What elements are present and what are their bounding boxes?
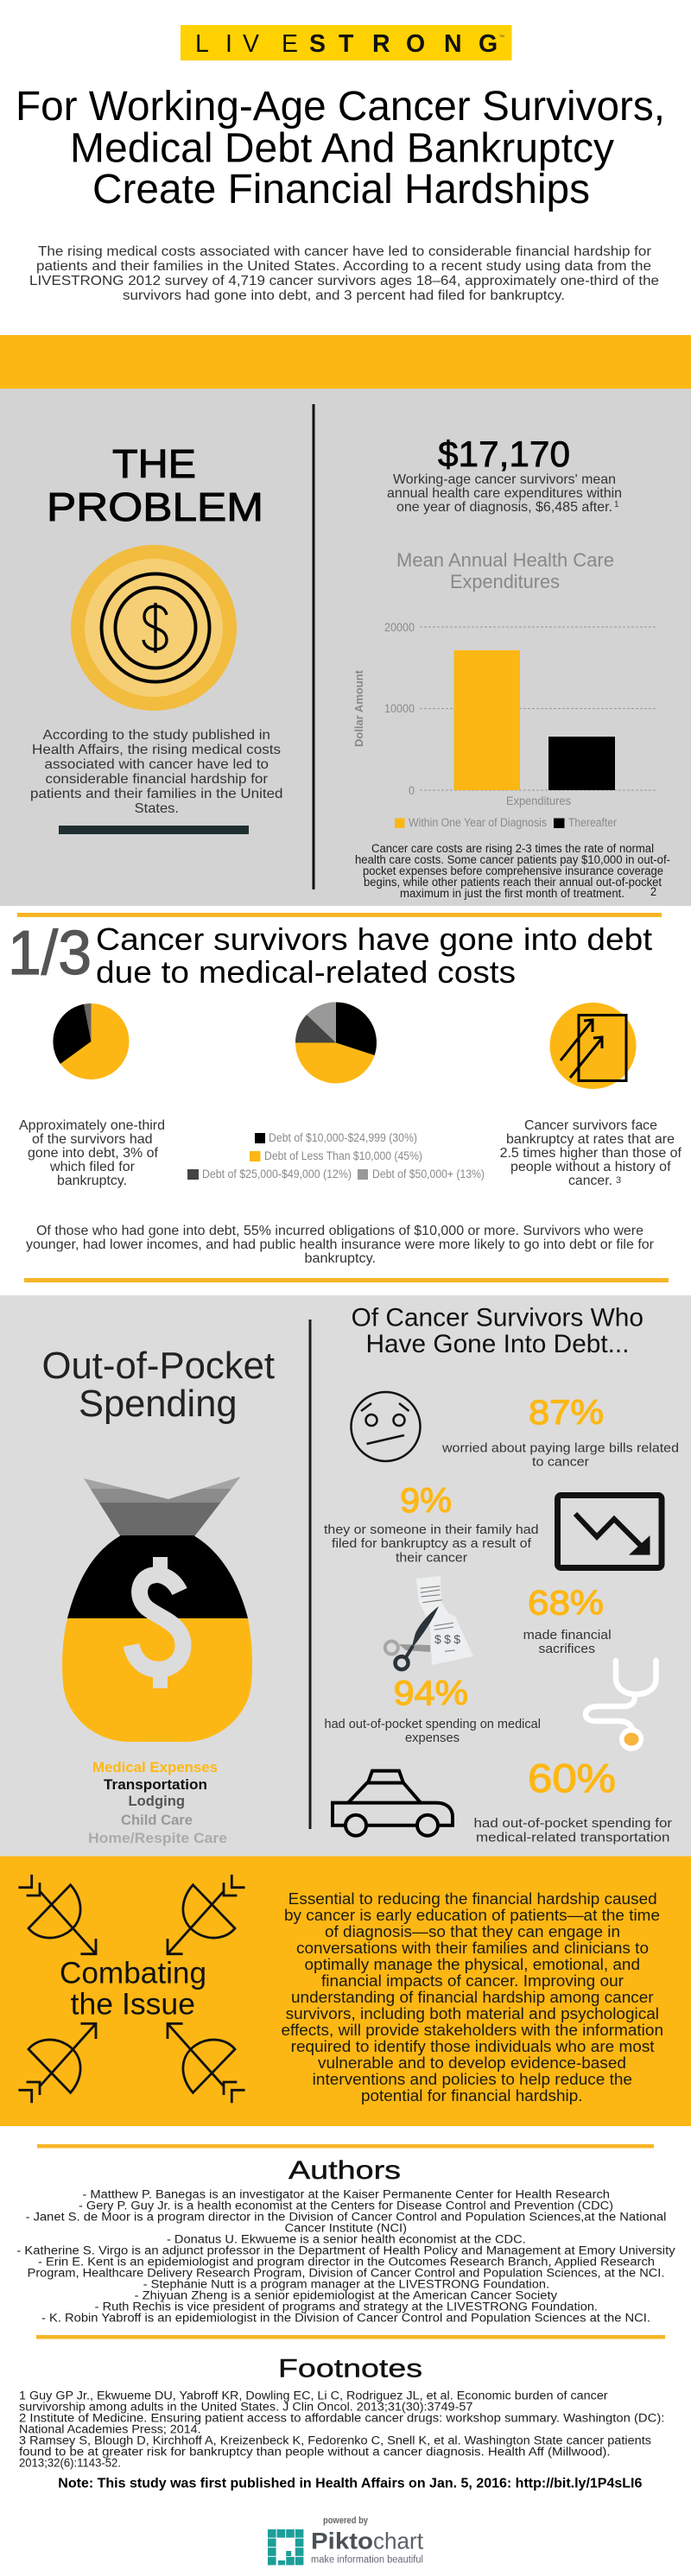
text: essential education: understanding of financial hardship among cancer (291, 1989, 654, 2006)
stat: 9%: 9% (400, 1482, 452, 1520)
text: one-third: bankruptcy. (57, 1174, 127, 1188)
legend: expense types: Child Care (121, 1812, 193, 1828)
text: author list (16, 2188, 675, 2325)
stat: 87%: to cancer (532, 1454, 589, 1470)
text: cost growth (355, 842, 670, 900)
legend: expense types: Medical Expenses (92, 1759, 218, 1775)
stat: 68%: made financial (523, 1628, 612, 1642)
text: study summary (30, 728, 283, 816)
text: bankruptcy rates: people without a history of (510, 1160, 671, 1174)
title: Medical Debt And Bankruptcy (70, 126, 614, 171)
bar chart: mean annual expenditures: Within One Year of Diagnosis (409, 816, 547, 829)
icon: money bag (62, 1472, 252, 1742)
text: footnotes: survivorship among adults in the United States. J Clin Oncol. 2013;31(30):3749-57 (19, 2401, 472, 2414)
icon: coin (71, 545, 237, 711)
text: one-third (19, 1118, 165, 1188)
intro text: patients and their families in the United States. According to a recent study using data from the (36, 259, 651, 274)
stat: $17,170: 1 (614, 500, 619, 510)
text: essential education: optimally manage the physical, emotional, and (304, 1956, 640, 1973)
text: essential education: vulnerable and to develop evidence-based (318, 2054, 626, 2072)
heading: the problem (47, 441, 263, 529)
text: who went into debt: younger, had lower incomes, and had public health insurance were more likely to go into debt or file for (26, 1237, 655, 1252)
bar chart: mean annual expenditures (353, 549, 657, 829)
logo: powered by Piktochart (268, 2516, 423, 2565)
orange band (0, 335, 691, 389)
text: who went into debt: Of those who had gone into debt, 55% incurred obligations of $10,000 or more. Survivors who were (36, 1224, 643, 1238)
text: essential education: effects, will provide stakeholders with the information (282, 2022, 663, 2039)
heading: debt: due to medical-related costs (96, 954, 516, 990)
stat: $17,170: $17,170 (438, 434, 570, 474)
stat: 68%: 68% (528, 1585, 604, 1623)
heading: out-of-pocket (41, 1345, 275, 1425)
text: essential education: of diagnosis—so that they can engage in (325, 1923, 620, 1940)
icon: falling chart (558, 1496, 662, 1568)
icon: bow and arrow bottom-right (168, 2023, 245, 2103)
text: study summary: patients and their families in the United (30, 787, 283, 801)
legend: expense types (88, 1759, 227, 1846)
logo: Livestrong: TM (499, 34, 504, 38)
heading: authors: Authors (288, 2156, 401, 2185)
bar chart: mean annual expenditures: 20000 (384, 621, 415, 634)
text: bankruptcy rates: 3 (616, 1175, 621, 1186)
panel: out-of-pocket spending (0, 1295, 691, 1857)
stat: 94% (325, 1674, 541, 1745)
stat: 60%: 60% (528, 1756, 616, 1801)
icon: Piktochart mark (268, 2529, 303, 2565)
logo: powered by Piktochart: make information beautiful (311, 2554, 423, 2565)
divider line (36, 2335, 665, 2339)
bar chart: mean annual expenditures: 0 (409, 784, 415, 797)
text: essential education: survivors, including both material and psychological (286, 2005, 659, 2022)
panel: the problem (0, 389, 691, 906)
text: author list: - Donatus U. Ekwueme is a senior health economist at the CDC. (167, 2233, 526, 2246)
stat: 60% (473, 1756, 672, 1845)
stat: $17,170: one year of diagnosis, $6,485 after. (396, 500, 612, 515)
text: who went into debt (26, 1224, 655, 1266)
icon: worried face (351, 1392, 420, 1461)
text: footnotes: 2 Institute of Medicine. Ensuring patient access to affordable cancer drugs: workshop summary. Washington (DC): (19, 2412, 664, 2425)
legend: expense types: Home/Respite Care (88, 1830, 227, 1846)
panel: one third in debt (8, 919, 682, 1266)
text: essential education: by cancer is early education of patients—at the time (284, 1907, 660, 1924)
text: one-third: gone into debt, 3% of (28, 1146, 159, 1161)
bar chart: mean annual expenditures: 10000 (384, 702, 415, 715)
pie legend: Debt of $10,000-$24,999 (30%) (269, 1131, 417, 1144)
text: author list: - Ruth Rechis is vice president of programs and strategy at the LIVESTRONG Foundation. (95, 2301, 598, 2313)
stat: 68%: sacrifices (539, 1642, 595, 1656)
bar chart: mean annual expenditures: Expenditures (450, 571, 560, 592)
heading: of cancer survivors (352, 1304, 643, 1358)
logo: Livestrong (181, 25, 511, 60)
text: author list: - K. Robin Yabroff is an epidemiologist in the Division of Cancer Control and Population Sciences at the NCI. (41, 2312, 650, 2325)
text: cost growth: pocket expenses before comprehensive insurance coverage (363, 864, 663, 877)
icon: bow and arrow top-left (18, 1875, 96, 1954)
stat: $17,170 (387, 434, 622, 515)
text: author list: - Stephanie Nutt is a program manager at the LIVESTRONG Foundation. (143, 2278, 549, 2291)
text: one-third: of the survivors had (32, 1132, 152, 1147)
intro text: The rising medical costs associated with cancer have led to considerable financial hardship for (38, 244, 652, 259)
stat: $17,170: Working-age cancer survivors' mean (393, 472, 616, 487)
text: essential education: required to identify those individuals who are most (291, 2038, 655, 2055)
title: For Working-Age Cancer Survivors, (16, 84, 665, 130)
text: cost growth: Cancer care costs are rising 2-3 times the rate of normal (371, 842, 654, 855)
legend: expense types: Transportation (104, 1776, 207, 1793)
text: essential education: potential for financial hardship. (361, 2087, 582, 2104)
logo: Livestrong: LIVE (195, 30, 298, 58)
text: footnotes (19, 2389, 664, 2470)
note: first published: Note: This study was first published in Health Affairs on Jan. 5, 2016: http://bit.ly/1P4sLI6 (58, 2477, 642, 2491)
panel: combating the issue (0, 1857, 691, 2126)
text: essential education: financial impacts of cancer. Improving our (321, 1972, 624, 1990)
text: footnotes: National Academies Press; 2014. (19, 2423, 201, 2436)
logo: Livestrong: STRONG (309, 30, 498, 58)
dark bar (59, 826, 249, 834)
bar chart: mean annual expenditures: Thereafter (568, 816, 617, 829)
divider line (24, 1278, 669, 1282)
pie legend: Debt of $50,000+ (13%) (372, 1168, 485, 1180)
text: essential education: interventions and policies to help reduce the (313, 2071, 632, 2088)
text: bankruptcy rates: cancer. (568, 1174, 612, 1188)
stat: 1/3: 1/3 (8, 919, 92, 988)
text: cost growth: 2 (650, 885, 656, 898)
stat: 94%: expenses (405, 1731, 460, 1745)
text: bankruptcy rates: Cancer survivors face (524, 1118, 657, 1133)
heading: of cancer survivors: Of Cancer Survivors Who (352, 1304, 643, 1332)
text: author list: - Katherine S. Virgo is an adjunct professor in the Department of Health Policy and Management at Emory University (16, 2244, 675, 2257)
stat: 9%: their cancer (396, 1551, 467, 1566)
text: who went into debt: bankruptcy. (304, 1251, 376, 1266)
icon: car (333, 1771, 453, 1836)
text: study summary: Health Affairs, the rising medical costs (32, 743, 281, 757)
heading: combating the issue: Combating (60, 1957, 206, 1991)
text: author list: - Janet S. de Moor is a program director in the Division of Cancer Control and Population Sciences,at the National (26, 2211, 666, 2224)
text: author list: - Zhiyuan Zheng is a senior epidemiologist at the American Cancer Society (135, 2289, 557, 2302)
text: cost growth: begins, while other patients reach their annual out-of-pocket (364, 876, 662, 889)
heading: combating the issue: the Issue (71, 1988, 195, 2022)
pie legend: Debt of Less Than $10,000 (45%) (264, 1149, 422, 1162)
text: essential education: conversations with their families and clinicians to (296, 1940, 649, 1957)
logo: powered by Piktochart: Pikto (311, 2529, 373, 2554)
icon: stethoscope (586, 1661, 656, 1751)
text: one-third: which filed for (49, 1160, 136, 1174)
text: study summary: considerable financial hardship for (45, 772, 269, 787)
text: study summary: associated with cancer have led to (45, 757, 269, 772)
stat: 87%: worried about paying large bills related (441, 1440, 679, 1456)
text: study summary: According to the study published in (43, 728, 270, 743)
logo: powered by Piktochart: chart (373, 2529, 423, 2554)
bar chart: mean annual expenditures: Expenditures (506, 794, 571, 807)
pie legend (187, 1131, 485, 1180)
stat: 9% (324, 1482, 539, 1566)
stat: 94%: 94% (394, 1674, 468, 1712)
icon: scissors cutting receipt (385, 1576, 473, 1669)
stat: 68% (523, 1585, 612, 1656)
intro text: LIVESTRONG 2012 survey of 4,719 cancer survivors ages 18–64, approximately one-third of the (29, 274, 659, 288)
text: footnotes: found to be at greater risk for bankruptcy than people without a cancer diagnosis. Health Aff (Millwood). (19, 2446, 611, 2459)
legend: expense types: Lodging (128, 1793, 185, 1809)
text: bankruptcy rates: bankruptcy at rates that are (506, 1132, 675, 1147)
heading: debt (96, 921, 652, 990)
text: author list: - Matthew P. Banegas is an investigator at the Kaiser Permanente Center for Health Research (82, 2188, 610, 2201)
heading: out-of-pocket: Spending (79, 1383, 237, 1425)
stat: 9%: filed for bankruptcy as a result of (332, 1536, 532, 1551)
text: bankruptcy rates (500, 1118, 682, 1188)
text: author list: Cancer Institute (NCI) (285, 2222, 407, 2235)
stat: 94%: had out-of-pocket spending on medical (325, 1717, 541, 1731)
title (16, 84, 665, 212)
pie legend: Debt of $25,000-$49,000 (12%) (202, 1168, 352, 1180)
heading: the problem: PROBLEM (47, 484, 263, 529)
pie chart: share in debt (53, 1003, 129, 1079)
text: one-third: Approximately one-third (19, 1118, 165, 1133)
intro text (29, 244, 659, 303)
bar chart: mean annual expenditures: Mean Annual Health Care (396, 549, 614, 571)
text: bankruptcy rates: 2.5 times higher than those of (500, 1146, 682, 1161)
stat: $17,170: annual health care expenditures within (387, 486, 622, 501)
text: footnotes: 1 Guy GP Jr., Ekwueme DU, Yabroff KR, Dowling EC, Li C, Rodriguez JL, et al. Economic burden of cancer (19, 2389, 608, 2402)
text: study summary: States. (135, 801, 179, 816)
logo: powered by Piktochart: powered by (323, 2516, 369, 2526)
intro text: survivors had gone into debt, and 3 percent had filed for bankruptcy. (123, 288, 565, 303)
bar chart: mean annual expenditures: Dollar Amount (353, 669, 365, 747)
divider line (17, 913, 662, 917)
text: cost growth: maximum in just the first month of treatment. (400, 887, 624, 900)
icon: scissors cutting receipt: $$$ (434, 1632, 460, 1646)
title: Create Financial Hardships (92, 167, 590, 212)
text: essential education (282, 1890, 663, 2104)
stat: 87%: 87% (529, 1394, 604, 1432)
text: author list: - Erin E. Kent is an epidemiologist and program director in the Outcomes Research Branch, Applied Research (38, 2256, 655, 2269)
heading: out-of-pocket: Out-of-Pocket (41, 1345, 275, 1387)
text: footnotes: 2013;32(6):1143-52. (19, 2457, 121, 2470)
icon: bow and arrow top-right (168, 1875, 245, 1954)
text: cost growth: health care costs. Some cancer patients pay $10,000 in out-of- (355, 853, 670, 866)
stat: 9%: they or someone in their family had (324, 1522, 539, 1537)
icon: bow and arrow bottom-left (18, 2023, 96, 2103)
pie chart: debt amounts (295, 1002, 377, 1083)
text: essential education: Essential to reducing the financial hardship caused (288, 1890, 657, 1908)
heading: debt: Cancer survivors have gone into debt (96, 921, 652, 957)
heading: combating the issue (60, 1957, 206, 2022)
stat: 87% (441, 1394, 679, 1470)
text: author list: - Gery P. Guy Jr. is a health economist at the Centers for Disease Control and Prevention (CDC) (79, 2199, 613, 2212)
stat: 60%: medical-related transportation (476, 1831, 670, 1845)
heading: of cancer survivors: Have Gone Into Debt... (366, 1330, 629, 1358)
text: author list: Program, Healthcare Delivery Research Program, Division of Cancer Control and Population Sciences, at the NCI. (28, 2267, 664, 2280)
stat: 60%: had out-of-pocket spending for (473, 1816, 672, 1831)
divider line (37, 2144, 654, 2149)
heading: the problem: THE (112, 441, 196, 486)
heading: footnotes: Footnotes (278, 2355, 422, 2383)
icon: rising arrows (549, 1003, 636, 1089)
text: footnotes: 3 Ramsey S, Blough D, Kirchhoff A, Kreizenbeck K, Fedorenko C, Snell K, et al. Washington State cancer patients (19, 2434, 651, 2447)
